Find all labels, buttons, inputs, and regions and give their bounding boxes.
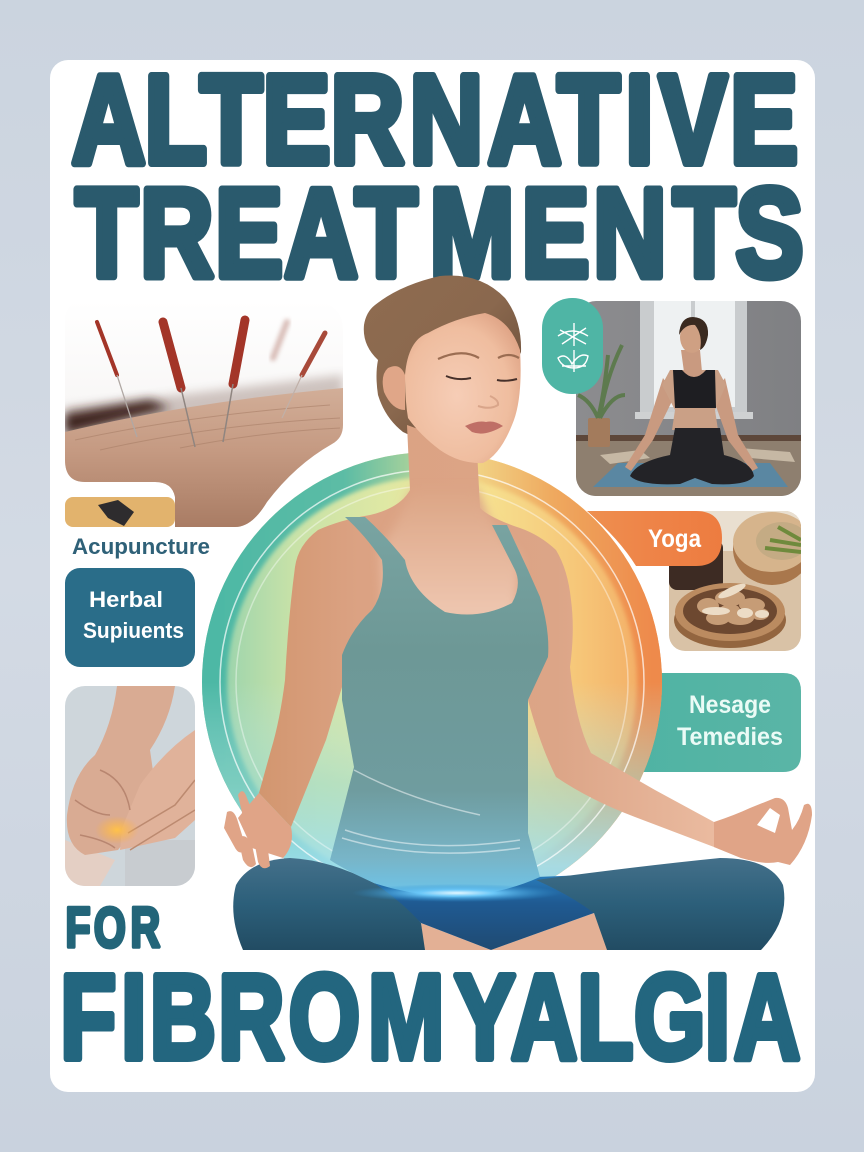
pill: lotus icon (542, 298, 603, 394)
nose (478, 396, 498, 408)
eyebrows (438, 353, 519, 359)
tank waves (342, 770, 520, 853)
title: for: FOR (66, 896, 160, 960)
ear (383, 366, 405, 410)
tank top (330, 517, 548, 897)
woman figure (224, 275, 812, 950)
white card (50, 60, 815, 1092)
title: alternative: ALTERNATIVE (72, 50, 798, 191)
label: acupuncture: Acupuncture (72, 534, 210, 559)
neck, shoulders and arms (259, 425, 755, 858)
chest (380, 490, 520, 620)
right hand (714, 798, 812, 865)
hair (364, 275, 521, 440)
lap (374, 872, 660, 950)
closed eyes (446, 376, 517, 381)
title: fibromyalgia: FIBROMYALGIA (60, 949, 800, 1085)
mouth (465, 422, 503, 434)
face (405, 313, 521, 463)
label: yoga: Yoga (648, 525, 702, 553)
photo: hands massage (65, 686, 195, 886)
orange label background (587, 511, 722, 566)
herbal box: Supiuents (83, 618, 184, 643)
legs: skin feet (421, 913, 608, 950)
photo: bowls and herbs (669, 511, 811, 651)
photo: yoga room (576, 301, 801, 496)
herbal box (65, 568, 195, 667)
belly glow (352, 884, 562, 902)
teal label: nesage temedies (630, 673, 801, 772)
teal label: nesage temedies: Temedies (677, 723, 783, 751)
right leg (536, 858, 784, 950)
circular aura (202, 452, 662, 912)
teal label: nesage temedies: Nesage (689, 691, 771, 719)
herbal box: Herbal (89, 587, 163, 612)
left leg (233, 858, 425, 950)
photo: acupuncture needles (65, 301, 343, 527)
title: treatments: TREATMENTS (75, 164, 804, 304)
left hand (224, 791, 292, 868)
